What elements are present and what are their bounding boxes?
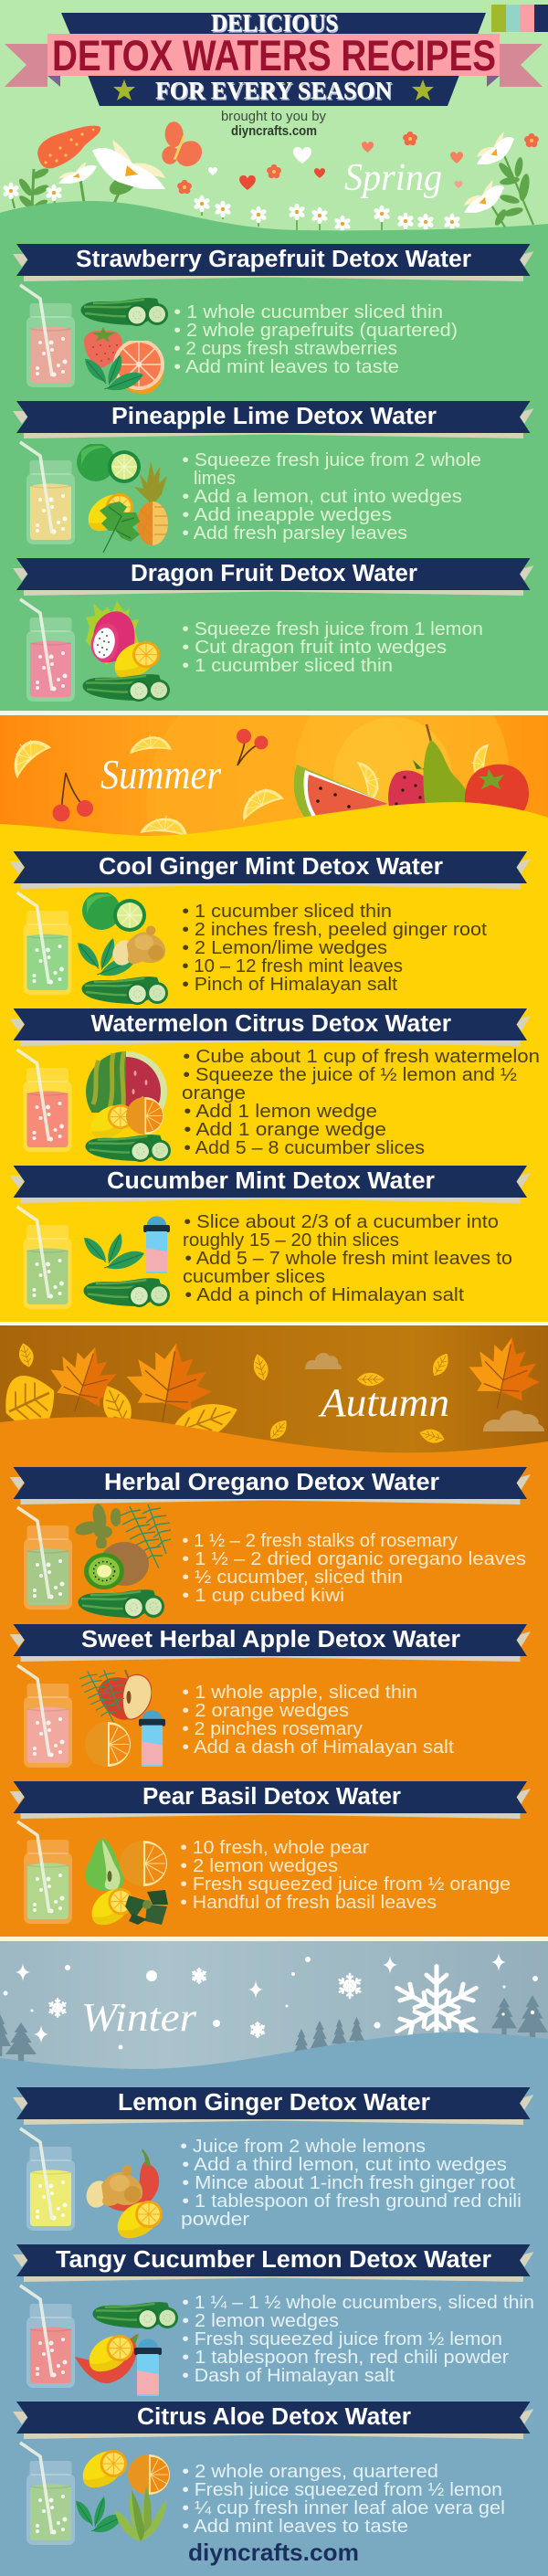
recipe: Watermelon Citrus: • Squeeze the juice of ½ lemon and ½ — [183, 1065, 517, 1085]
recipe: Herbal Oregano: • ½ cucumber, sliced thin — [182, 1568, 403, 1588]
recipe: Lemon Ginger — [13, 2087, 533, 2238]
season label: Winter: Winter — [81, 1995, 197, 2040]
recipe: Citrus Aloe: • 2 whole oranges, quartered — [182, 2462, 438, 2482]
recipe: Dragon Fruit: • Cut dragon fruit into wedges — [182, 638, 447, 658]
recipe: Sweet Herbal Apple: • 2 pinches rosemary — [182, 1719, 363, 1739]
recipe: Lemon Ginger: Lemon Ginger Detox Water — [118, 2090, 430, 2116]
recipe: Watermelon Citrus: • Add 1 lemon wedge — [184, 1102, 377, 1122]
recipe: Tangy Cucumber Lemon: • 2 lemon wedges — [182, 2311, 339, 2331]
recipe: Cool Ginger Mint — [9, 851, 531, 1005]
footer: site name: diyncrafts.com — [188, 2539, 359, 2566]
recipe: Lemon Ginger: • Mince about 1-inch fresh ginger root — [182, 2173, 515, 2193]
recipe: Tangy Cucumber Lemon — [13, 2244, 534, 2396]
recipe: Pineapple Lime: • Add ineapple wedges — [182, 505, 392, 525]
recipe: Tangy Cucumber Lemon: • Fresh squeezed juice from ½ lemon — [182, 2329, 502, 2349]
recipe: Herbal Oregano: • 1 ½ – 2 dried organic oregano leaves — [182, 1549, 526, 1569]
credit line: diyncrafts.com — [231, 123, 317, 139]
panel: summer — [0, 663, 548, 1325]
recipe: Cool Ginger Mint: Cool Ginger Mint Detox Water — [99, 854, 443, 880]
recipe: Dragon Fruit: • 1 cucumber sliced thin — [182, 656, 393, 676]
recipe: Citrus Aloe — [13, 2402, 533, 2545]
recipe: Cool Ginger Mint: • Pinch of Himalayan salt — [182, 975, 397, 995]
recipe: Lemon Ginger: • Add a third lemon, cut into wedges — [182, 2155, 507, 2175]
title ribbon — [5, 9, 543, 106]
recipe: Cucumber Mint: • Add a pinch of Himalayan salt — [184, 1285, 464, 1305]
recipe: Strawberry Grapefruit: • 2 whole grapefruits (quartered) — [174, 321, 458, 341]
summer illustration: citrus, cherries, fruit — [15, 715, 529, 835]
spring illustration: flowers, butterfly, hearts — [2, 116, 539, 232]
title ribbon: FOR EVERY SEASON — [155, 77, 392, 104]
recipe: Tangy Cucumber Lemon: • 1 tablespoon fresh, red chili powder — [182, 2348, 509, 2368]
recipe: Citrus Aloe: Citrus Aloe Detox Water — [137, 2404, 411, 2430]
recipe: Sweet Herbal Apple: • Add a dash of Himalayan salt — [182, 1737, 454, 1758]
panel: autumn — [0, 1325, 548, 1941]
season label: Autumn: Autumn — [318, 1380, 449, 1425]
recipe: Watermelon Citrus: Watermelon Citrus Detox Water — [91, 1011, 451, 1037]
recipe: Cucumber Mint: roughly 15 – 20 thin slices — [183, 1230, 399, 1251]
recipe: Pear Basil: • 2 lemon wedges — [180, 1856, 338, 1876]
recipe: Dragon Fruit — [13, 558, 533, 702]
season label: Summer: Summer — [100, 751, 222, 797]
recipe: Pineapple Lime: • Add a lemon, cut into wedges — [182, 487, 462, 507]
recipe: Watermelon Citrus: • Add 1 orange wedge — [184, 1120, 386, 1140]
recipe: Strawberry Grapefruit — [13, 244, 533, 394]
recipe: Strawberry Grapefruit: Strawberry Grapefruit Detox Water — [76, 247, 471, 272]
recipe: Watermelon Citrus — [9, 1008, 540, 1162]
recipe: Watermelon Citrus: • Cube about 1 cup of fresh watermelon — [183, 1047, 540, 1067]
recipe: Strawberry Grapefruit: • 1 whole cucumber sliced thin — [174, 302, 443, 322]
recipe: Pear Basil: Pear Basil Detox Water — [142, 1784, 401, 1810]
recipe: Tangy Cucumber Lemon: • Dash of Himalayan salt — [182, 2366, 395, 2386]
recipe: Cucumber Mint: • Slice about 2/3 of a cucumber into — [184, 1212, 499, 1232]
recipe: Lemon Ginger: • Juice from 2 whole lemons — [180, 2137, 426, 2157]
recipe: Citrus Aloe: • ¼ cup fresh inner leaf aloe vera gel — [182, 2498, 505, 2518]
credit line: brought to you by — [221, 109, 326, 124]
recipe: Tangy Cucumber Lemon: • 1 ¼ – 1 ½ whole cucumbers, sliced thin — [182, 2293, 534, 2313]
recipe: Cool Ginger Mint: • 1 cucumber sliced thin — [182, 902, 392, 922]
recipe: Lemon Ginger: powder — [181, 2210, 249, 2230]
panel: spring — [0, 0, 548, 715]
colour swatches — [491, 5, 548, 32]
recipe: Citrus Aloe: • Fresh juice squeezed from ½ lemon — [182, 2480, 502, 2500]
panel: winter — [0, 1941, 548, 2576]
recipe: Sweet Herbal Apple: Sweet Herbal Apple Detox Water — [81, 1627, 460, 1652]
recipe: Sweet Herbal Apple — [9, 1624, 531, 1768]
recipe: Herbal Oregano — [9, 1467, 531, 1619]
recipe: Herbal Oregano: Herbal Oregano Detox Water — [104, 1470, 439, 1495]
season label: Spring: Spring — [344, 157, 442, 199]
recipe: Citrus Aloe: • Add mint leaves to taste — [182, 2517, 408, 2537]
recipe: Cucumber Mint: • Add 5 – 7 whole fresh mint leaves to — [184, 1249, 512, 1269]
recipe: Cucumber Mint: cucumber slices — [183, 1267, 325, 1287]
recipe: Pineapple Lime: • Squeeze fresh juice from 2 whole — [182, 450, 481, 470]
recipe: Watermelon Citrus: • Add 5 – 8 cucumber slices — [184, 1138, 425, 1158]
recipe: Pear Basil: • 10 fresh, whole pear — [180, 1838, 369, 1858]
recipe: Cool Ginger Mint: • 2 inches fresh, peeled ginger root — [182, 920, 487, 940]
recipe: Watermelon Citrus: orange — [182, 1083, 246, 1103]
recipe: Dragon Fruit: Dragon Fruit Detox Water — [131, 561, 417, 586]
recipe: Cucumber Mint — [9, 1166, 531, 1309]
recipe: Pear Basil — [9, 1781, 531, 1925]
recipe: Sweet Herbal Apple: • 2 orange wedges — [182, 1701, 349, 1721]
credit line — [221, 109, 326, 139]
recipe: Cool Ginger Mint: • 10 – 12 fresh mint leaves — [182, 956, 403, 977]
recipe: Tangy Cucumber Lemon: Tangy Cucumber Lemon Detox Water — [56, 2247, 491, 2273]
recipe: Pear Basil: • Handful of fresh basil leaves — [180, 1893, 437, 1913]
recipe: Cool Ginger Mint: • 2 Lemon/lime wedges — [182, 938, 387, 958]
recipe: Cucumber Mint: Cucumber Mint Detox Water — [107, 1168, 435, 1194]
recipe: Herbal Oregano: • 1 cup cubed kiwi — [182, 1586, 344, 1606]
autumn illustration: leaves and clouds — [0, 1330, 547, 1450]
recipe: Pineapple Lime: Pineapple Lime Detox Water — [111, 404, 437, 429]
recipe: Dragon Fruit: • Squeeze fresh juice from 1 lemon — [182, 619, 483, 639]
title ribbon: DELICIOUS — [211, 9, 338, 37]
recipe: Lemon Ginger: • 1 tablespoon of fresh ground red chili — [182, 2191, 522, 2212]
recipe: Pineapple Lime: limes — [194, 469, 236, 489]
recipe: Herbal Oregano: • 1 ½ – 2 fresh stalks of rosemary — [182, 1531, 458, 1551]
recipe: Sweet Herbal Apple: • 1 whole apple, sliced thin — [182, 1683, 417, 1703]
recipe: Pineapple Lime: • Add fresh parsley leaves — [182, 523, 407, 544]
recipe: Strawberry Grapefruit: • 2 cups fresh strawberries — [174, 339, 397, 359]
recipe: Pear Basil: • Fresh squeezed juice from ½ orange — [180, 1874, 511, 1895]
recipe: Pineapple Lime — [13, 401, 533, 553]
winter illustration: snow, trees, snowflakes — [0, 1953, 548, 2064]
recipe: Strawberry Grapefruit: • Add mint leaves to taste — [174, 357, 399, 377]
